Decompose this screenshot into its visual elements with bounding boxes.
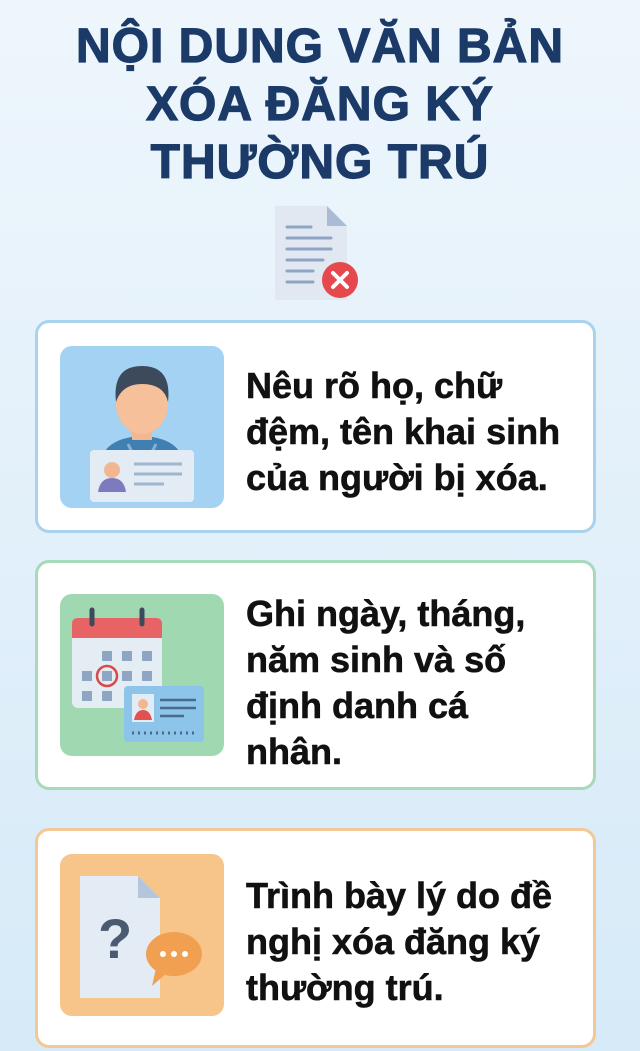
text: card 2 bbox=[246, 593, 525, 772]
text: card 3 bbox=[246, 875, 552, 1008]
text: card 3: thường trú. bbox=[246, 967, 444, 1008]
icon: person with ID badge bbox=[60, 346, 224, 508]
icon: document with delete mark bbox=[275, 206, 358, 300]
title: NỘI DUNG VĂN BẢN bbox=[76, 20, 564, 73]
text: card 3: Trình bày lý do đề bbox=[246, 875, 552, 916]
icon: calendar and ID card bbox=[60, 594, 224, 756]
text: card 2: năm sinh và số bbox=[246, 639, 506, 680]
text: card 1: đệm, tên khai sinh bbox=[246, 411, 560, 452]
text: card 2: định danh cá bbox=[246, 685, 468, 726]
text: card 2: Ghi ngày, tháng, bbox=[246, 593, 525, 634]
text: card 1: Nêu rõ họ, chữ bbox=[246, 365, 502, 406]
text: card 2: nhân. bbox=[246, 731, 342, 772]
panel: card 3 reason bbox=[35, 828, 596, 1048]
panel: card 2 birth date bbox=[35, 560, 596, 790]
title bbox=[76, 18, 564, 189]
icon: document with question and speech bubble: ? bbox=[98, 907, 132, 970]
text: card 3: nghị xóa đăng ký bbox=[246, 921, 540, 962]
text: card 1 bbox=[246, 365, 560, 498]
title: THƯỜNG TRÚ bbox=[151, 136, 489, 189]
title: XÓA ĐĂNG KÝ bbox=[146, 78, 494, 131]
text: card 1: của người bị xóa. bbox=[246, 457, 548, 498]
panel: card 1 name bbox=[35, 320, 596, 533]
icon: document with question and speech bubble bbox=[60, 854, 224, 1016]
